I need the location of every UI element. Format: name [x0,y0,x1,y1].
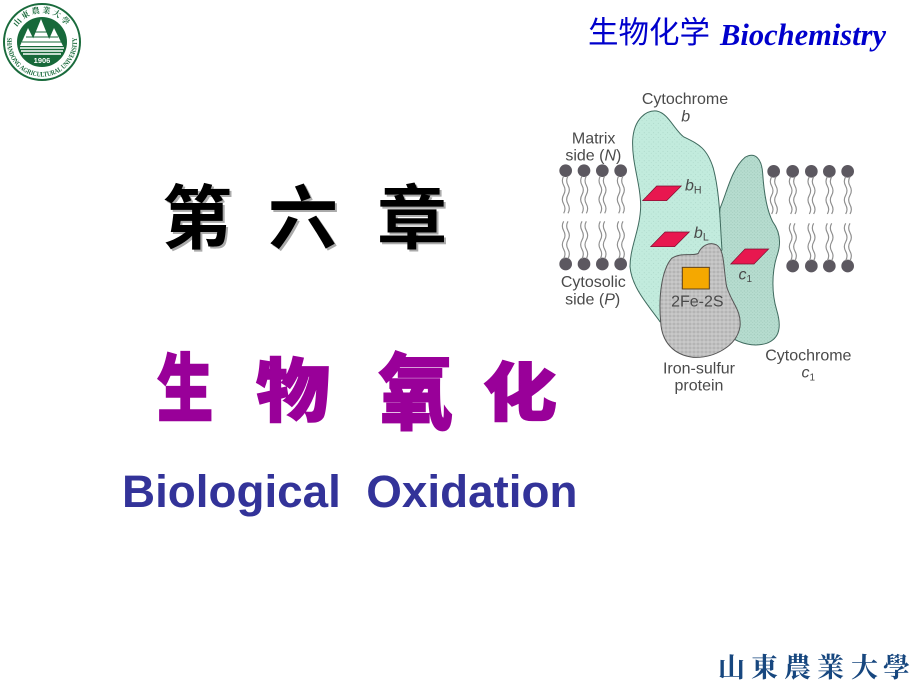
protein: cytochrome c1 [717,155,780,345]
diagram labels: Iron-sulfur [663,360,736,377]
diagram labels: Matrix [572,130,615,147]
diagram labels: c [739,266,747,283]
footer: university name calligraphy: 東 [751,653,778,683]
diagram labels: protein [675,378,723,395]
diagram labels: Cytochrome [765,348,852,365]
heme bL [651,232,689,247]
logo: Shandong Agricultural University seal: 1906 [34,56,50,65]
diagram labels: c [802,365,810,382]
diagram: cytochrome bc1 complex in membrane [559,91,854,395]
chapter heading: 第六章: 六 [268,180,338,258]
header: course title: 生物化学 [588,16,710,50]
protein: cytochrome b [630,111,722,322]
diagram labels [561,91,852,395]
footer: university name calligraphy: 大 [851,653,878,683]
diagram labels: b [681,108,690,125]
diagram labels: b [685,178,694,195]
diagram labels: L [703,232,709,244]
diagram labels: Cytosolic [561,274,626,291]
footer: university name calligraphy [718,653,910,683]
diagram labels: side (N) [565,147,621,164]
diagram labels: 1 [810,372,816,383]
diagram labels: Cytochrome [642,91,728,108]
header: course title [588,16,886,52]
header: course title: Biochemistry [720,18,886,52]
diagram labels: b [694,225,703,242]
chapter title: 生物氧化: 生 [157,350,213,432]
logo: Shandong Agricultural University seal [3,3,81,81]
chapter heading: 第六章: 章 [377,180,447,258]
diagram labels: 1 [747,274,753,285]
chapter title: 生物氧化: 化 [483,360,557,430]
membrane lipids: right group [767,165,854,272]
footer: university name calligraphy: 農 [784,653,811,683]
logo: Shandong Agricultural University seal: 山東農業大學 [14,6,70,27]
heme c1 [731,249,769,264]
English title: Biological Oxidation [122,466,577,517]
footer: university name calligraphy: 學 [883,653,910,683]
logo: Shandong Agricultural University seal: SHANDONG AGRICULTURAL UNIVERSITY [7,38,77,77]
chapter title: 生物氧化 [157,350,557,441]
diagram labels: side (P) [565,291,620,308]
protein: iron-sulfur protein [660,244,740,357]
footer: university name calligraphy: 業 [817,653,844,683]
heme bH [643,186,681,201]
footer: university name calligraphy: 山 [718,653,745,683]
chapter heading: 第六章: 第 [162,180,232,258]
chapter title: 生物氧化: 物 [256,355,330,432]
chapter title: 生物氧化: 氧 [379,350,453,441]
membrane lipids: left group [559,164,627,270]
diagram labels: 2Fe-2S [671,294,724,311]
diagram labels: H [694,184,702,196]
2Fe-2S cluster [682,267,709,289]
chapter heading: 第六章 [162,180,447,258]
